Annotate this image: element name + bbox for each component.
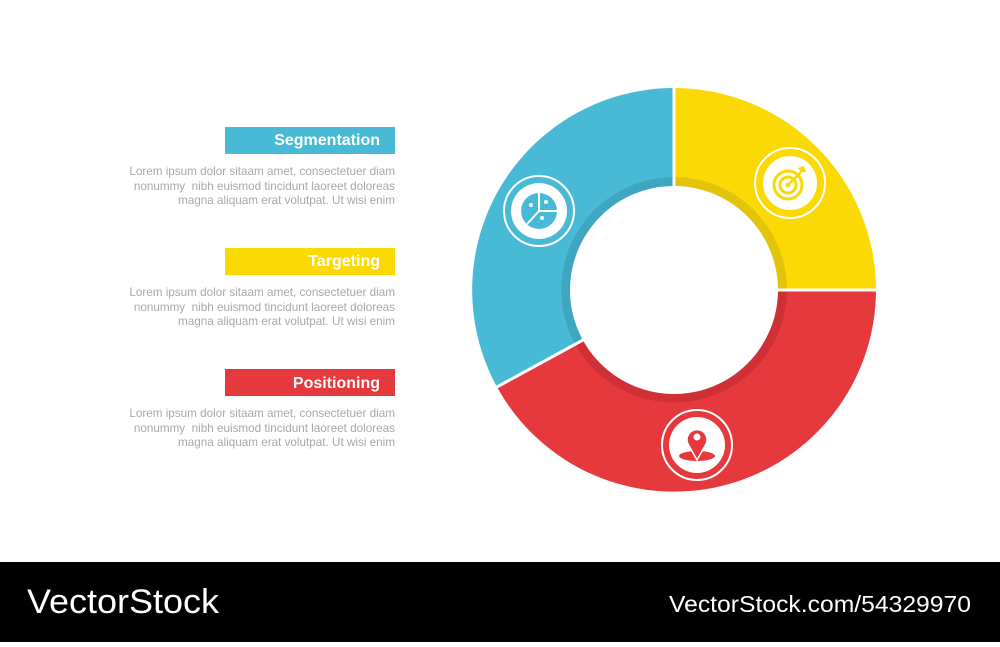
text: segmentation description: Lorem ipsum dolor sitaam amet, consectetuer diam [129,165,395,178]
text: targeting description: Lorem ipsum dolor sitaam amet, consectetuer diam [129,286,395,299]
label: Targeting: Targeting [308,253,380,270]
label: Segmentation: Segmentation [274,132,380,149]
text: segmentation description: magna aliquam erat volutpat. Ut wisi enim [178,194,395,207]
label: Targeting [225,248,395,275]
footer url: VectorStock.com/54329970 [669,591,971,617]
footer bar [0,562,1000,642]
text: targeting description: nonummy nibh euismod tincidunt laoreet doloreas [134,301,395,314]
text: targeting description: magna aliquam erat volutpat. Ut wisi enim [178,315,395,328]
text: positioning description: magna aliquam erat volutpat. Ut wisi enim [178,436,395,449]
segment: blue [472,88,674,387]
text: segmentation description [129,165,395,207]
text: positioning description: Lorem ipsum dolor sitaam amet, consectetuer diam [129,407,395,420]
text: targeting description [129,286,395,328]
text: positioning description [129,407,395,449]
footer brand: VectorStock [27,583,220,621]
icon: segmentation pie [504,176,574,246]
label: Positioning [225,369,395,396]
label: Segmentation [225,127,395,154]
icon: location pin [662,410,732,480]
text: segmentation description: nonummy nibh euismod tincidunt laoreet doloreas [134,180,395,193]
label: Positioning: Positioning [293,375,380,392]
icon: target [755,148,825,218]
segment: red [497,290,876,492]
text: positioning description: nonummy nibh euismod tincidunt laoreet doloreas [134,422,395,435]
segment: yellow [674,88,876,290]
